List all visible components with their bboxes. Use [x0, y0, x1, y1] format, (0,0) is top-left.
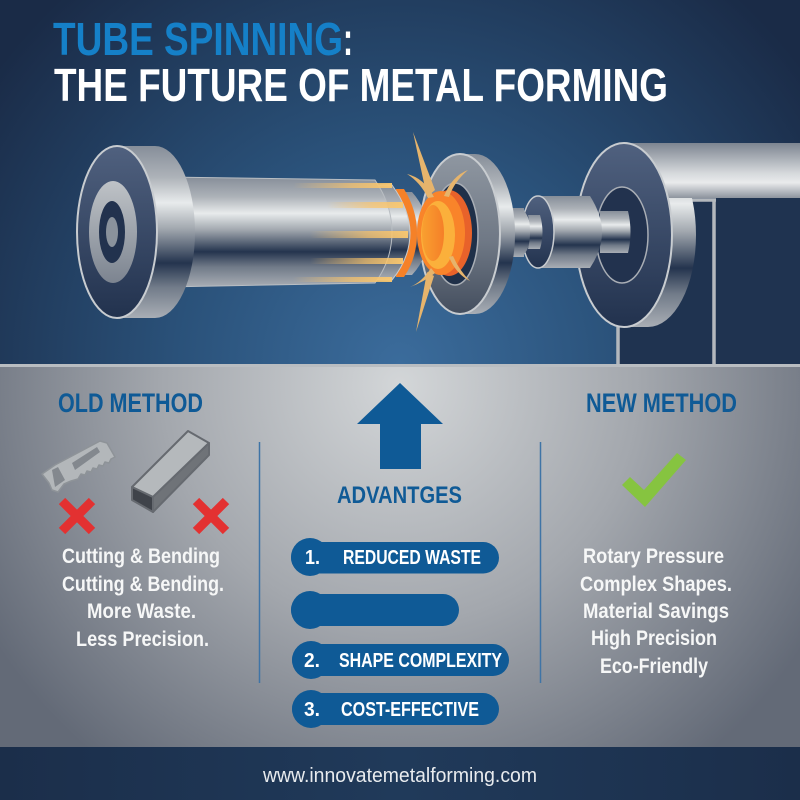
new method heading: NEW METHOD [586, 388, 737, 418]
machine stand [617, 198, 800, 367]
new method column [580, 388, 737, 678]
glowing forming zone [417, 190, 472, 276]
footer [0, 747, 800, 800]
old method list: Cutting & Bending [62, 545, 220, 568]
new method list: Material Savings [583, 600, 729, 623]
advantage 1 pill [291, 538, 499, 576]
new method list [580, 545, 732, 678]
advantage 2 pill: 2. [304, 650, 320, 672]
left flange [77, 146, 195, 318]
advantage 2 pill: SHAPE COMPLEXITY [339, 650, 503, 672]
icon: up arrow [357, 383, 443, 469]
old method list: Cutting & Bending. [62, 573, 224, 596]
spindle and collar [510, 196, 630, 268]
old method list: Less Precision. [76, 628, 209, 651]
old method heading: OLD METHOD [58, 388, 203, 418]
advantages heading: ADVANTGES [337, 482, 462, 509]
icon: red cross [196, 501, 226, 531]
advantage 3 pill: 3. [304, 699, 320, 721]
icon: green check [622, 453, 686, 507]
title: : [343, 13, 353, 65]
middle flange [420, 154, 515, 314]
title: TUBE SPINNING [53, 13, 343, 65]
new method list: Eco-Friendly [600, 655, 708, 678]
new method list: Complex Shapes. [580, 573, 732, 596]
advantage 3 pill [292, 690, 499, 728]
icon: square tube [132, 431, 209, 512]
blank pill [291, 591, 459, 629]
comparison panel [0, 365, 800, 747]
sparks [407, 132, 470, 332]
title [53, 13, 668, 111]
icon: hand saw [42, 441, 115, 492]
heat streaks [293, 183, 408, 282]
new method list: High Precision [591, 627, 717, 650]
background [0, 0, 800, 365]
footer: www.innovatemetalforming.com [262, 765, 537, 787]
old method list [62, 545, 224, 651]
icon: red cross [62, 501, 92, 531]
big pipe and flange [576, 143, 800, 327]
old method list: More Waste. [87, 600, 196, 623]
advantage 3 pill: COST-EFFECTIVE [341, 699, 479, 721]
new method list: Rotary Pressure [583, 545, 724, 568]
machine illustration [77, 132, 800, 367]
main tube sections [165, 177, 428, 287]
old method column [42, 388, 226, 651]
advantage 1 pill: REDUCED WASTE [343, 547, 481, 569]
advantage 2 pill [292, 641, 509, 679]
advantages column [291, 383, 509, 728]
advantage 1 pill: 1. [305, 547, 320, 569]
